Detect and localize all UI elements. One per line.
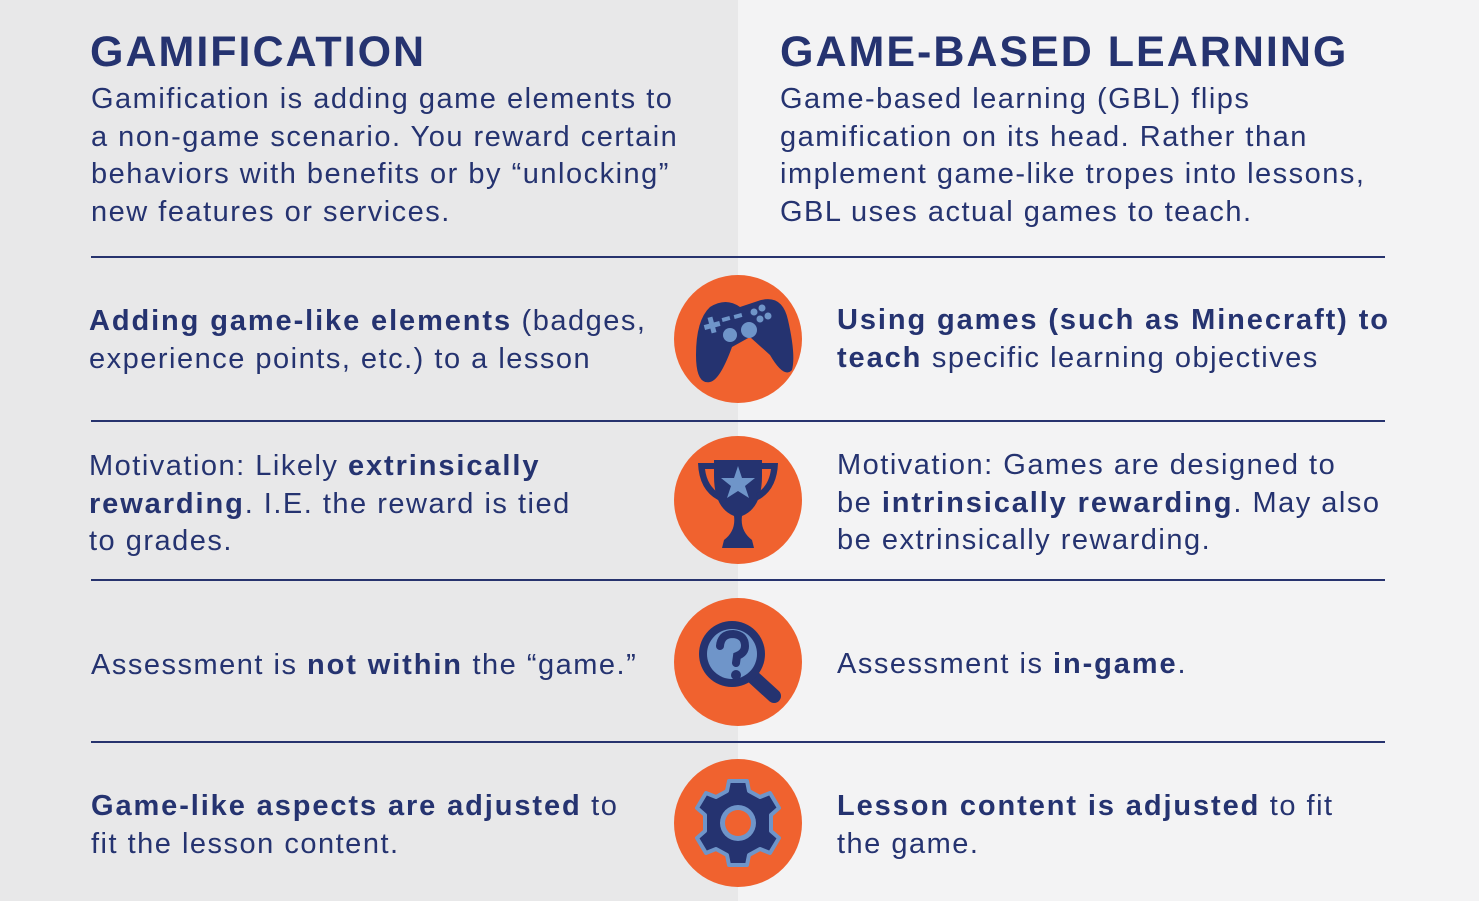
row 2 right text: Motivation: Games are designed to — [837, 449, 1336, 481]
text: gamification description — [91, 83, 678, 228]
row 1 right text: Using games (such as Minecraft) to — [837, 304, 1390, 336]
text: GBL description — [780, 83, 1365, 228]
text: gamification description: Gamification is adding game elements to — [91, 83, 673, 115]
row 1 left text: Adding game-like elements (badges, — [89, 305, 646, 337]
row 2 left text: rewarding. I.E. the reward is tied — [89, 488, 571, 520]
text: GBL description: gamification on its head. Rather than — [780, 120, 1308, 152]
icon: trophy — [674, 436, 802, 564]
icon: gear — [674, 759, 802, 887]
text: GBL description: GBL uses actual games to teach. — [780, 196, 1253, 228]
icon: game controller — [674, 275, 802, 403]
text: gamification description: new features or services. — [91, 196, 451, 228]
row 2 right text: be intrinsically rewarding. May also — [837, 486, 1381, 518]
row 2 left text: to grades. — [89, 525, 233, 557]
row 1 right text — [837, 304, 1390, 374]
row 4 right text — [837, 790, 1334, 860]
row 1 left text — [89, 305, 646, 374]
row 4 right text: Lesson content is adjusted to fit — [837, 790, 1334, 822]
text: GBL description: Game-based learning (GBL) flips — [780, 83, 1250, 115]
row 2 right text: be extrinsically rewarding. — [837, 524, 1211, 556]
row 4 left text: fit the lesson content. — [91, 828, 400, 860]
title: gamification: GAMIFICATION — [90, 28, 426, 76]
row 2 right text — [837, 449, 1381, 556]
row 3 right text: Assessment is in-game. — [837, 648, 1187, 680]
row 4 left text: Game-like aspects are adjusted to — [91, 790, 618, 822]
row 3 left text: Assessment is not within the “game.” — [91, 649, 637, 681]
text: gamification description: behaviors with benefits or by “unlocking” — [91, 158, 670, 190]
row 2 left text: Motivation: Likely extrinsically — [89, 450, 540, 482]
row 4 left text — [91, 790, 618, 860]
text: gamification description: a non-game scenario. You reward certain — [91, 120, 678, 152]
row 2 left text — [89, 450, 571, 557]
text: GBL description: implement game-like tropes into lessons, — [780, 158, 1365, 190]
row 4 right text: the game. — [837, 828, 979, 860]
icon: magnifier question — [674, 598, 802, 726]
row 1 right text: teach specific learning objectives — [837, 342, 1319, 374]
title: game-based learning: GAME-BASED LEARNING — [780, 28, 1348, 76]
row 1 left text: experience points, etc.) to a lesson — [89, 342, 591, 374]
